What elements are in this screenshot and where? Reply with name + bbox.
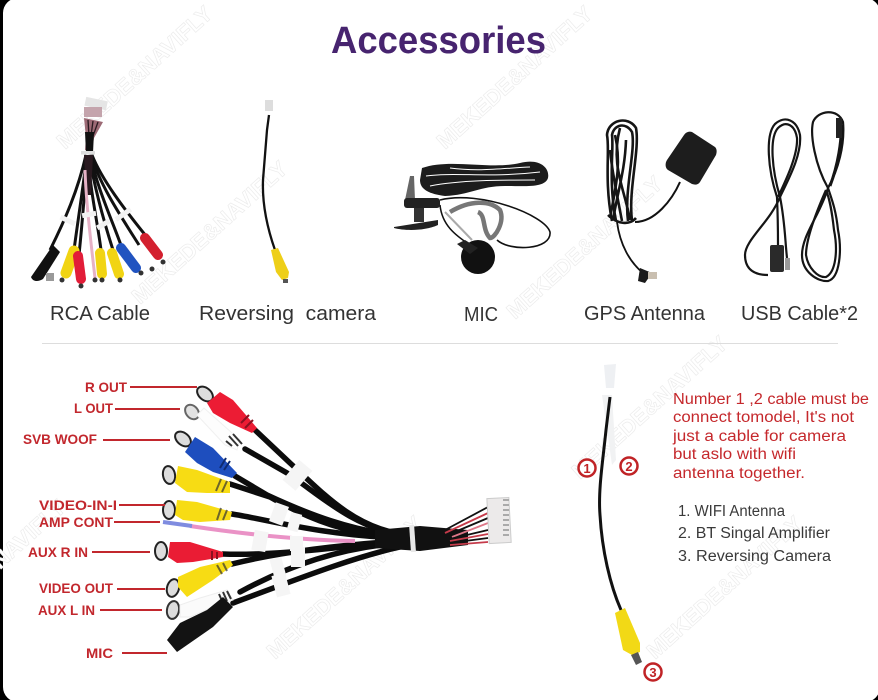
label: USB Cable*2: USB Cable*2 <box>741 303 858 325</box>
label: AMP CONT <box>39 514 160 530</box>
connector: white L OUT <box>182 402 242 450</box>
connector: red R OUT <box>194 384 257 433</box>
label: VIDEO-IN-I: VIDEO-IN-I <box>39 497 117 513</box>
label: Reversing camera: Reversing camera <box>199 303 377 325</box>
label: SVB WOOF: SVB WOOF <box>23 431 97 447</box>
watermarks: MEKEDE&NAVIFLY <box>567 331 733 484</box>
marker 2: 2 <box>625 459 633 474</box>
watermarks: MEKEDE&NAVIFLY <box>52 1 218 154</box>
label: AUX R IN: AUX R IN <box>28 544 88 560</box>
connector: yellow VIDEO OUT <box>165 560 233 598</box>
label: MIC: MIC <box>464 304 498 326</box>
marker 3 <box>644 664 662 680</box>
icon: microphone <box>394 162 550 274</box>
label: VIDEO OUT <box>39 580 165 596</box>
connector: red AUX R IN <box>155 542 223 563</box>
diagram: RCA cable harness <box>155 384 511 652</box>
diagram: reversing camera cable <box>600 364 642 665</box>
label: AMP CONT: AMP CONT <box>39 514 113 530</box>
cables <box>223 430 400 603</box>
marker 2 <box>620 458 638 474</box>
icon: GPS antenna <box>607 121 717 283</box>
red note: but aslo with wifi <box>673 446 796 463</box>
watermarks: MEKEDE&NAVIFLY <box>432 1 598 154</box>
label: VIDEO OUT: VIDEO OUT <box>39 580 113 596</box>
label: R OUT: R OUT <box>85 379 127 395</box>
label: AUX R IN <box>28 544 150 560</box>
marker 1: 1 <box>583 461 591 476</box>
connector: yellow 1 <box>162 465 230 493</box>
cable list: 3. Reversing Camera <box>678 548 831 565</box>
red note: Number 1 ,2 cable must be <box>673 391 869 408</box>
watermarks: MEKEDE&NAVIFLY <box>642 511 808 664</box>
connector: yellow 2 (VIDEO-IN-I) <box>163 500 232 522</box>
red note: just a cable for camera <box>672 428 846 445</box>
icon: small RCA cable <box>31 97 166 288</box>
label: R OUT <box>85 379 197 395</box>
bundle <box>375 526 468 551</box>
connector: blue SVB WOOF <box>172 429 237 478</box>
terminal block <box>487 497 511 544</box>
red callout labels <box>23 379 197 661</box>
cable tags <box>251 460 312 597</box>
watermarks: MEKEDE&NAVIFLY <box>262 511 428 664</box>
red note <box>672 391 869 482</box>
icon: USB cables <box>745 112 843 281</box>
label: L OUT: L OUT <box>74 400 113 416</box>
red note: connect tomodel, It's not <box>673 409 855 426</box>
watermarks: MEKEDE&NAVIFLY <box>127 156 293 309</box>
fan wires <box>445 507 488 545</box>
label: MIC: MIC <box>86 645 113 661</box>
icon: small reversing camera cable <box>263 100 289 283</box>
label: MIC <box>86 645 167 661</box>
label: AUX L IN <box>38 602 162 618</box>
connector: white AUX L IN <box>166 590 233 620</box>
label: AUX L IN: AUX L IN <box>38 602 95 618</box>
red note: antenna together. <box>673 465 805 482</box>
marker 1 <box>578 460 596 476</box>
label: VIDEO-IN-I <box>39 497 165 513</box>
cable list: 2. BT Singal Amplifier <box>678 525 830 542</box>
cable list <box>678 503 831 565</box>
marker 3: 3 <box>649 665 657 680</box>
title: Accessories <box>331 20 546 62</box>
connector: black MIC <box>167 597 233 652</box>
label: L OUT <box>74 400 180 416</box>
label: RCA Cable: RCA Cable <box>50 303 150 325</box>
cable list: 1. WIFI Antenna <box>678 503 785 520</box>
divider <box>42 343 838 344</box>
pink wire <box>190 526 355 541</box>
watermarks: MEKEDE&NAVIFLY <box>502 171 668 324</box>
label: GPS Antenna: GPS Antenna <box>584 303 706 325</box>
